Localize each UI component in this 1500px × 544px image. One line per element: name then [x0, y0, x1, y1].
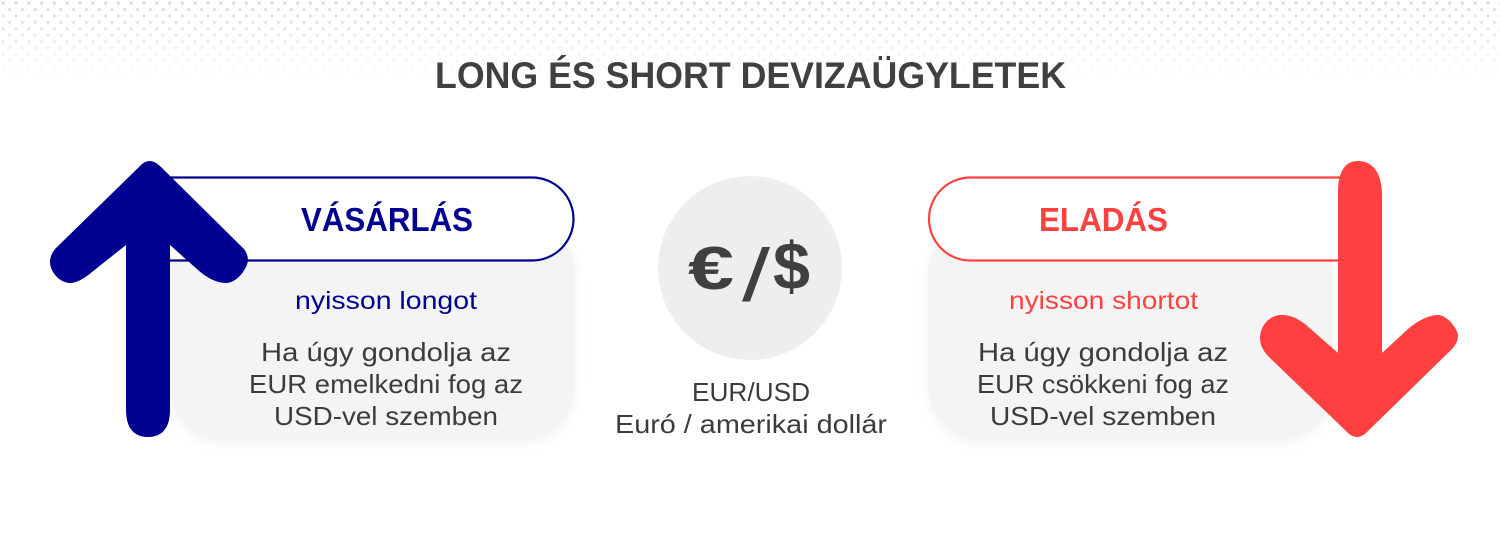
currency pair label: Euró / amerikai dollár: [615, 409, 887, 439]
description: short: EUR csökkeni fog az: [977, 369, 1229, 399]
panel: long / buy: [50, 161, 575, 441]
description: long: USD-vel szemben: [274, 401, 498, 431]
icon: up arrow: [50, 161, 248, 437]
description: long: EUR emelkedni fog az: [249, 369, 523, 399]
subheading: nyisson longot: nyisson longot: [295, 287, 477, 315]
description: short: USD-vel szemben: [990, 401, 1216, 431]
pill header: short: [929, 178, 1350, 260]
panel: short / sell: [928, 161, 1458, 441]
icon: euro / dollar circle: [658, 176, 842, 360]
icon: down arrow: [1260, 161, 1458, 437]
pill header: long: [165, 178, 574, 260]
icon: euro / dollar circle: /: [742, 234, 771, 317]
icon: euro / dollar circle: $: [773, 229, 810, 304]
currency pair label: [615, 377, 887, 439]
panel: currency pair: [615, 176, 887, 439]
description: long: Ha úgy gondolja az: [261, 337, 511, 367]
currency pair label: EUR/USD: [692, 377, 810, 407]
title: LONG ÉS SHORT DEVIZAÜGYLETEK: [435, 54, 1066, 96]
heading: VÁSÁRLÁS: VÁSÁRLÁS: [301, 201, 473, 238]
description: long: [249, 337, 523, 431]
description: short: [977, 337, 1229, 431]
icon: euro / dollar circle: €: [688, 235, 734, 302]
heading: ELADÁS: ELADÁS: [1039, 201, 1168, 238]
description: short: Ha úgy gondolja az: [978, 337, 1228, 367]
subheading: nyisson shortot: nyisson shortot: [1009, 287, 1198, 315]
card body: short: [928, 219, 1332, 441]
card body: long: [170, 219, 575, 441]
